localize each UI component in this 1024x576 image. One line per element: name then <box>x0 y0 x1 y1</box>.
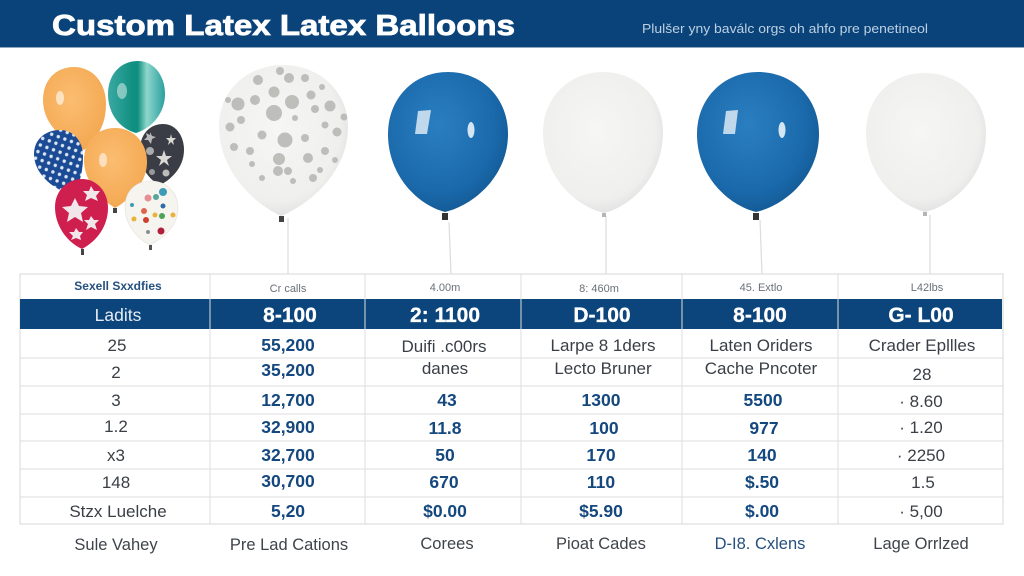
column: fifth values: · 8.60 <box>899 392 943 411</box>
column: third values: Lecto Bruner <box>554 359 652 378</box>
column: fourth values: 977 <box>749 418 779 438</box>
column sub-headers: L42lbs <box>911 282 944 294</box>
column: first values: 55,200 <box>261 335 315 355</box>
band labels: 8-100 <box>733 304 787 327</box>
band labels: D-100 <box>573 304 631 327</box>
column sub-headers <box>74 279 944 295</box>
column: third values: 170 <box>586 445 616 465</box>
column: first values: 32,900 <box>261 417 315 437</box>
column: third values: $5.90 <box>579 501 623 521</box>
column: third values: 110 <box>587 472 615 492</box>
column: third values: Larpe 8 1ders <box>551 336 655 355</box>
column: fifth values <box>869 336 975 521</box>
band labels: G- L00 <box>888 304 954 327</box>
column: fourth values: $.00 <box>745 501 779 521</box>
footer category labels: Pre Lad Cations <box>230 536 348 554</box>
column sub-headers: 4.00m <box>430 282 460 294</box>
row labels column: 25 <box>108 336 126 355</box>
column: fifth values: · 2250 <box>897 446 945 465</box>
plain white balloon centre <box>543 72 663 274</box>
band labels: 2: 1100 <box>410 304 480 327</box>
row labels column: 148 <box>102 473 130 492</box>
footer category labels: Pioat Cades <box>556 535 646 553</box>
column sub-headers: 45. Extlo <box>740 282 782 294</box>
footer category labels: Corees <box>420 535 474 553</box>
column: fourth values: 140 <box>747 445 777 465</box>
band labels: 8-100 <box>263 304 317 327</box>
band labels: Ladits <box>95 305 142 325</box>
column sub-headers: 8: 460m <box>579 283 619 295</box>
column: second values: Duifi .c00rs <box>401 337 487 356</box>
column: second values: 50 <box>435 445 455 465</box>
row labels column <box>69 336 167 521</box>
solid blue balloon right <box>697 72 819 274</box>
column: second values: danes <box>422 359 468 378</box>
column: fifth values: 1.5 <box>911 473 935 492</box>
column: fifth values: 28 <box>913 365 931 384</box>
column: second values: $0.00 <box>423 501 467 521</box>
column: third values <box>551 336 655 521</box>
column: first values: 30,700 <box>261 471 315 491</box>
column: second values <box>401 337 487 521</box>
blue polka dot balloon <box>34 130 83 195</box>
orange balloon back <box>43 67 106 150</box>
column: second values: 43 <box>437 390 457 410</box>
table header band <box>20 299 1002 329</box>
column: third values: 100 <box>589 418 619 438</box>
column: first values: 35,200 <box>261 360 315 380</box>
column: fourth values: $.50 <box>745 472 779 492</box>
column: second values: 670 <box>429 472 459 492</box>
row labels column: 2 <box>111 363 121 382</box>
band labels <box>95 304 954 327</box>
row labels column: x3 <box>107 446 125 465</box>
header banner <box>0 0 1024 48</box>
footer category labels: Lage Orrlzed <box>873 535 969 553</box>
red star balloon <box>55 179 108 255</box>
column sub-headers: Sexell Sxxdfies <box>74 279 162 293</box>
patterned white balloon <box>219 65 348 274</box>
column: fourth values: 5500 <box>744 390 783 410</box>
column: third values: 1300 <box>582 390 621 410</box>
teal balloon <box>108 61 165 133</box>
specification table <box>20 274 1003 524</box>
row labels column: 3 <box>111 391 121 410</box>
plain white balloon right <box>866 73 986 274</box>
footer category labels: Sule Vahey <box>74 536 158 554</box>
column: fifth values: Crader Epllles <box>869 336 975 355</box>
column: first values: 12,700 <box>261 390 315 410</box>
orange balloon front <box>84 128 147 208</box>
column: fourth values <box>705 336 818 521</box>
row labels column: Stzx Luelche <box>69 502 167 521</box>
column: first values <box>261 335 315 521</box>
dark star balloon <box>140 124 184 185</box>
column: first values: 5,20 <box>271 501 305 521</box>
row labels column: 1.2 <box>104 417 128 436</box>
footer category labels <box>74 535 969 554</box>
footer category labels: D-I8. Cxlens <box>715 535 805 553</box>
header subtitle: Plulšer yny baválc orgs oh ahfo pre penetineol <box>642 22 928 36</box>
solid blue balloon left <box>388 72 508 274</box>
confetti balloon <box>125 181 178 250</box>
column: fourth values: Laten Oriders <box>710 336 812 355</box>
title: Custom Latex Latex Balloons <box>52 10 515 42</box>
balloon cluster <box>34 61 184 255</box>
column: first values: 32,700 <box>261 445 315 465</box>
column: second values: 11.8 <box>428 418 462 438</box>
column: fourth values: Cache Pncoter <box>705 359 818 378</box>
column: fifth values: · 1.20 <box>899 418 943 437</box>
column: fifth values: · 5,00 <box>899 502 943 521</box>
column sub-headers: Cr calls <box>270 283 307 295</box>
